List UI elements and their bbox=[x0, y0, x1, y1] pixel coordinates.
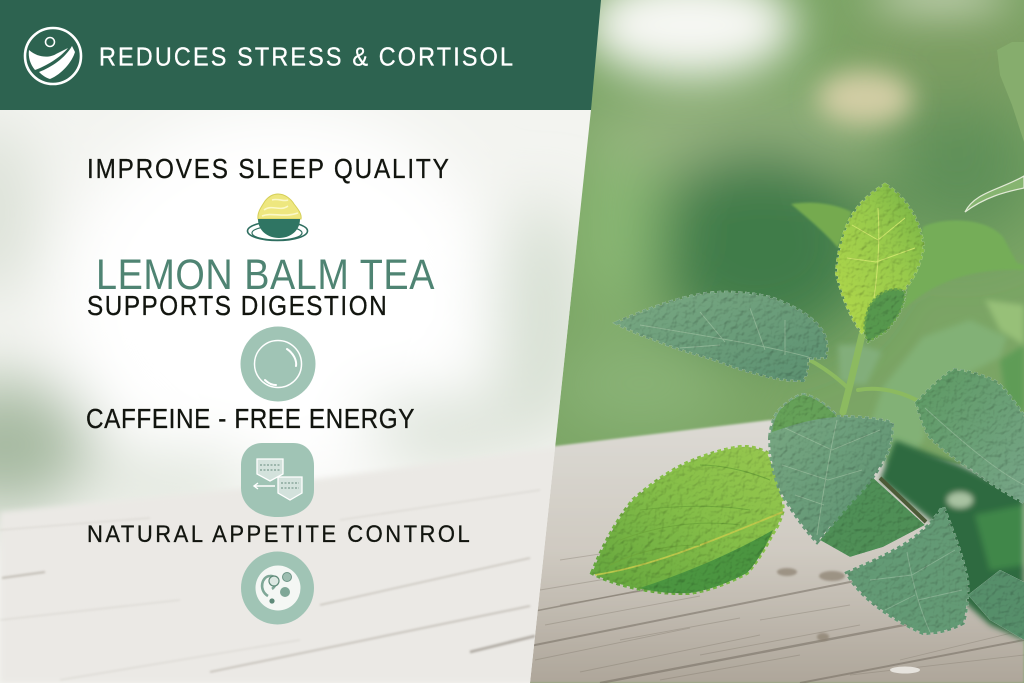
text: improves sleep quality: IMPROVES SLEEP QUALITY bbox=[87, 152, 449, 184]
icon: appetite circle bbox=[241, 552, 314, 624]
leaf: bright lower left bbox=[592, 447, 783, 593]
icon: digestive tiles bbox=[241, 443, 314, 517]
leaf: back right bbox=[903, 221, 1024, 310]
leaf: lower right sage bbox=[968, 570, 1024, 640]
header band bbox=[0, 0, 601, 110]
leaf: small dark bud bbox=[865, 289, 905, 342]
title: lemon balm tea: LEMON BALM TEA bbox=[96, 250, 434, 299]
icon: circle bubble bbox=[240, 326, 316, 402]
leaf: right sage bbox=[917, 370, 1024, 502]
leaves: lemon balm plant bbox=[592, 42, 1024, 640]
stems bbox=[806, 335, 925, 412]
leaf: center sage bbox=[770, 395, 892, 542]
heading: reduces stress: REDUCES STRESS & CORTISOL bbox=[99, 43, 513, 72]
icon: bowl bbox=[248, 194, 308, 240]
leaf: upper right sliver bbox=[965, 176, 1024, 212]
wooden table bbox=[0, 420, 1024, 683]
leaf: top right corner bbox=[997, 42, 1024, 142]
dark foliage base bbox=[880, 440, 1024, 640]
leaf: upper left sage bbox=[617, 293, 826, 380]
text: natural appetite control: NATURAL APPETITE CONTROL bbox=[87, 520, 470, 547]
panel: translucent benefits panel bbox=[0, 110, 600, 683]
icon: header logo bbox=[25, 28, 81, 84]
text: caffeine-free energy: CAFFEINE - FREE ENERGY bbox=[86, 403, 415, 434]
leaf: top yellow green bbox=[837, 185, 923, 333]
leaf: under center bbox=[820, 475, 925, 557]
leaf: back left blurred bbox=[791, 203, 852, 248]
leaf: bottom sage bbox=[847, 507, 967, 633]
textured leaves bbox=[592, 185, 1024, 640]
branch bbox=[880, 478, 926, 522]
soft background foliage bbox=[838, 300, 1024, 477]
text: supports digestion: SUPPORTS DIGESTION bbox=[87, 290, 387, 321]
